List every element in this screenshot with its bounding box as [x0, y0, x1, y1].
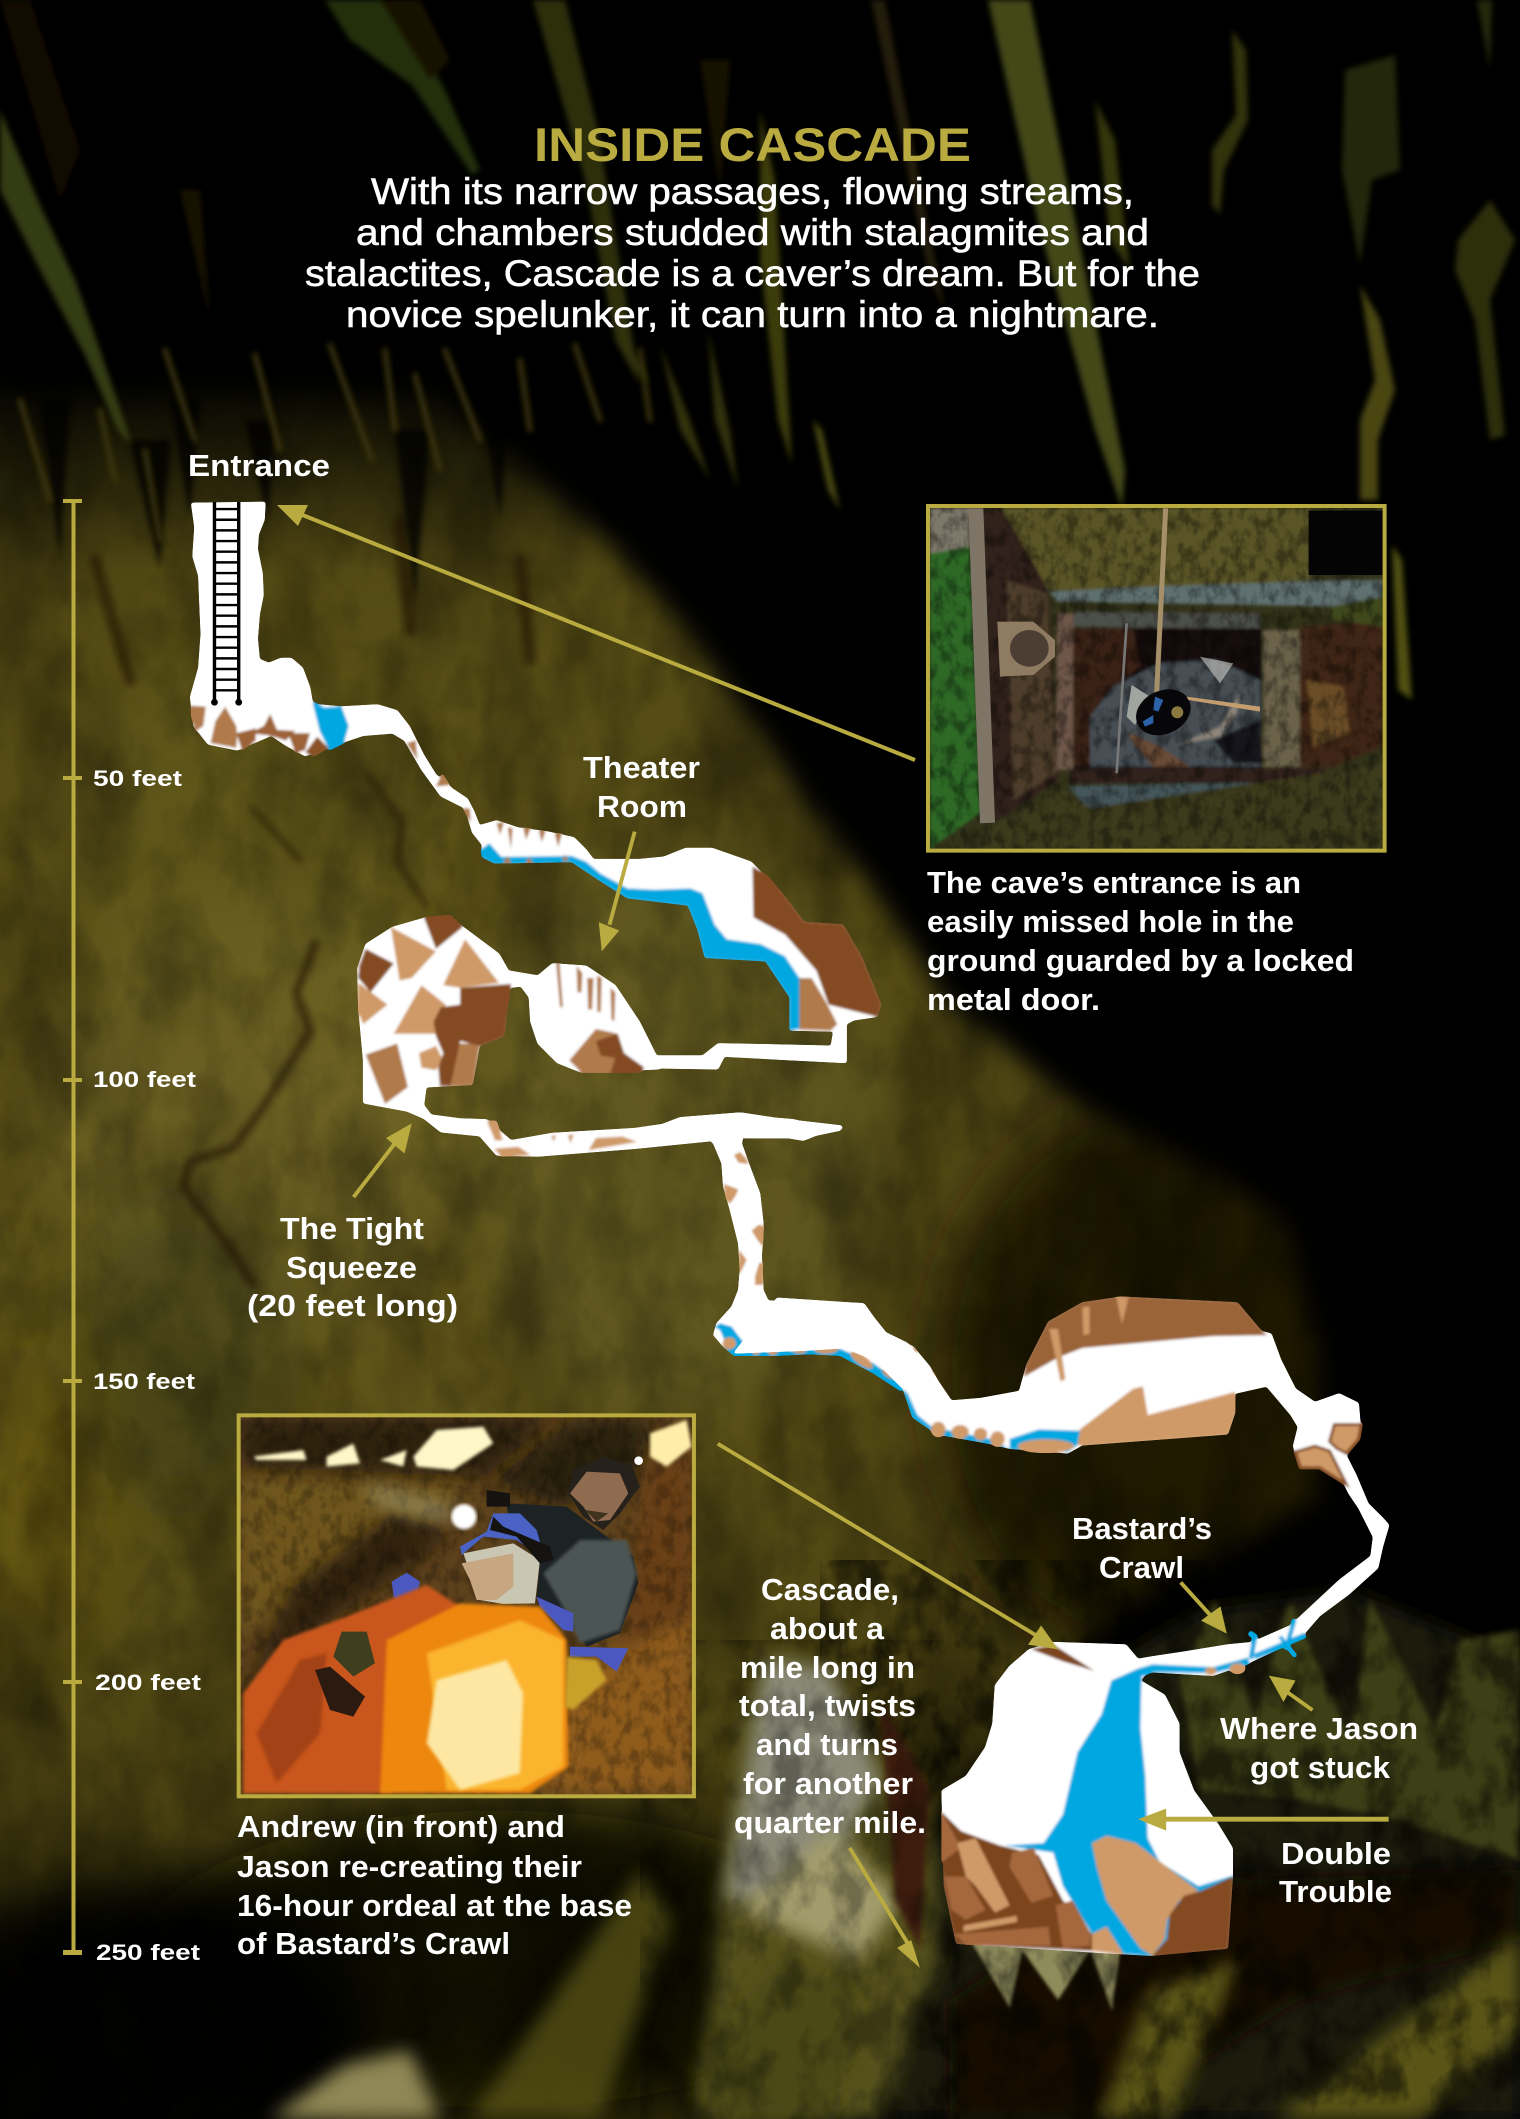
label: The Tight Squeeze: (20 feet long) [247, 1288, 458, 1323]
label: Where Jason got stuck: got stuck [1250, 1750, 1391, 1785]
intro text: stalactites, Cascade is a caver’s dream. But for the [305, 253, 1200, 294]
label: The Tight Squeeze: The Tight [280, 1211, 424, 1246]
bottom-right rock [700, 1560, 1520, 2119]
text: Cascade length note: Cascade, [761, 1572, 899, 1607]
caption: Andrew and Jason: of Bastard’s Crawl [237, 1926, 510, 1961]
caption: Andrew and Jason: 16-hour ordeal at the base [237, 1888, 632, 1923]
text: Cascade length note: about a [770, 1611, 885, 1646]
depth scale [63, 499, 202, 1965]
caption: Andrew and Jason: Jason re-creating their [237, 1849, 582, 1884]
cave map: vertical passage [660, 1113, 943, 1391]
depth scale: 50 feet [93, 766, 183, 791]
caption: Andrew and Jason: Andrew (in front) and [237, 1809, 565, 1844]
text: Cascade length note: mile long in [740, 1650, 915, 1685]
caption: cave entrance: The cave’s entrance is an [927, 865, 1301, 900]
arrow: entrance photo to entrance [277, 505, 915, 760]
cavers photo content [239, 1415, 694, 1796]
arrow: photo to base of Bastard's Crawl [718, 1444, 1058, 1649]
cave map: entrance to theater room [190, 502, 881, 1156]
intro text [305, 171, 1200, 335]
label: Bastard's Crawl [1072, 1511, 1212, 1585]
chamber, theater room, tight squeeze [357, 915, 843, 1156]
arrow: The Tight Squeeze [354, 1123, 412, 1197]
fade and fringe above rock [0, 345, 1050, 600]
caption: cave entrance [927, 865, 1354, 1017]
label: Double Trouble: Trouble [1279, 1874, 1392, 1909]
caption: cave entrance: metal door. [927, 982, 1100, 1017]
arrow: Double Trouble [1138, 1809, 1389, 1831]
arrow: the cave continues [850, 1848, 920, 1968]
depth scale: 250 feet [96, 1940, 201, 1965]
caption: Andrew and Jason [237, 1809, 632, 1961]
intro text: and chambers studded with stalagmites and [356, 212, 1149, 253]
photo: cave entrance door [928, 506, 1385, 851]
ceiling stalactites [0, 0, 1515, 700]
label: The Tight Squeeze: Squeeze [286, 1250, 417, 1285]
intro text: novice spelunker, it can turn into a nightmare. [346, 294, 1159, 335]
door photo content [930, 508, 1383, 849]
rock cracks [95, 520, 530, 1283]
label: Where Jason got stuck [1220, 1711, 1418, 1785]
depth scale: 200 feet [95, 1670, 202, 1695]
label: Bastard's Crawl: Crawl [1099, 1550, 1184, 1585]
text: Cascade length note: total, twists [739, 1688, 916, 1723]
label: Entrance: Entrance [188, 448, 330, 483]
label: Theater Room: Theater [583, 750, 700, 785]
photo: Andrew and Jason [239, 1415, 694, 1796]
label: Double Trouble: Double [1281, 1836, 1391, 1871]
rock wall [0, 396, 1324, 2119]
label: Bastard's Crawl: Bastard’s [1072, 1511, 1212, 1546]
caption: cave entrance: ground guarded by a locked [927, 943, 1354, 978]
arrow: Where Jason got stuck [1269, 1676, 1313, 1710]
entrance shaft and stream chamber [190, 502, 881, 1069]
label: Double Trouble [1279, 1836, 1392, 1909]
depth scale: 150 feet [93, 1369, 196, 1394]
label: The Tight Squeeze [247, 1211, 458, 1323]
text: Cascade length note: and turns [756, 1727, 898, 1762]
text: Cascade length note [734, 1572, 926, 1840]
cave map: lower chambers and Double Trouble [733, 1297, 1389, 1955]
Double Trouble room [942, 1619, 1305, 1955]
label: Theater Room [583, 750, 700, 824]
caption: cave entrance: easily missed hole in the [927, 904, 1294, 939]
icon: ladder [211, 502, 242, 706]
depth scale: 100 feet [93, 1067, 197, 1092]
pale lit rock [270, 1640, 960, 2119]
arrow: Bastard's Crawl [1181, 1582, 1227, 1634]
intro text: With its narrow passages, flowing streams, [371, 171, 1134, 212]
label: Where Jason got stuck: Where Jason [1220, 1711, 1418, 1746]
text: Cascade length note: for another [743, 1766, 913, 1801]
title: INSIDE CASCADE [534, 118, 971, 171]
arrow: Theater Room [599, 832, 635, 951]
label: Theater Room: Room [597, 789, 687, 824]
large chamber and passage [733, 1297, 1389, 1633]
text: Cascade length note: quarter mile. [734, 1805, 926, 1840]
